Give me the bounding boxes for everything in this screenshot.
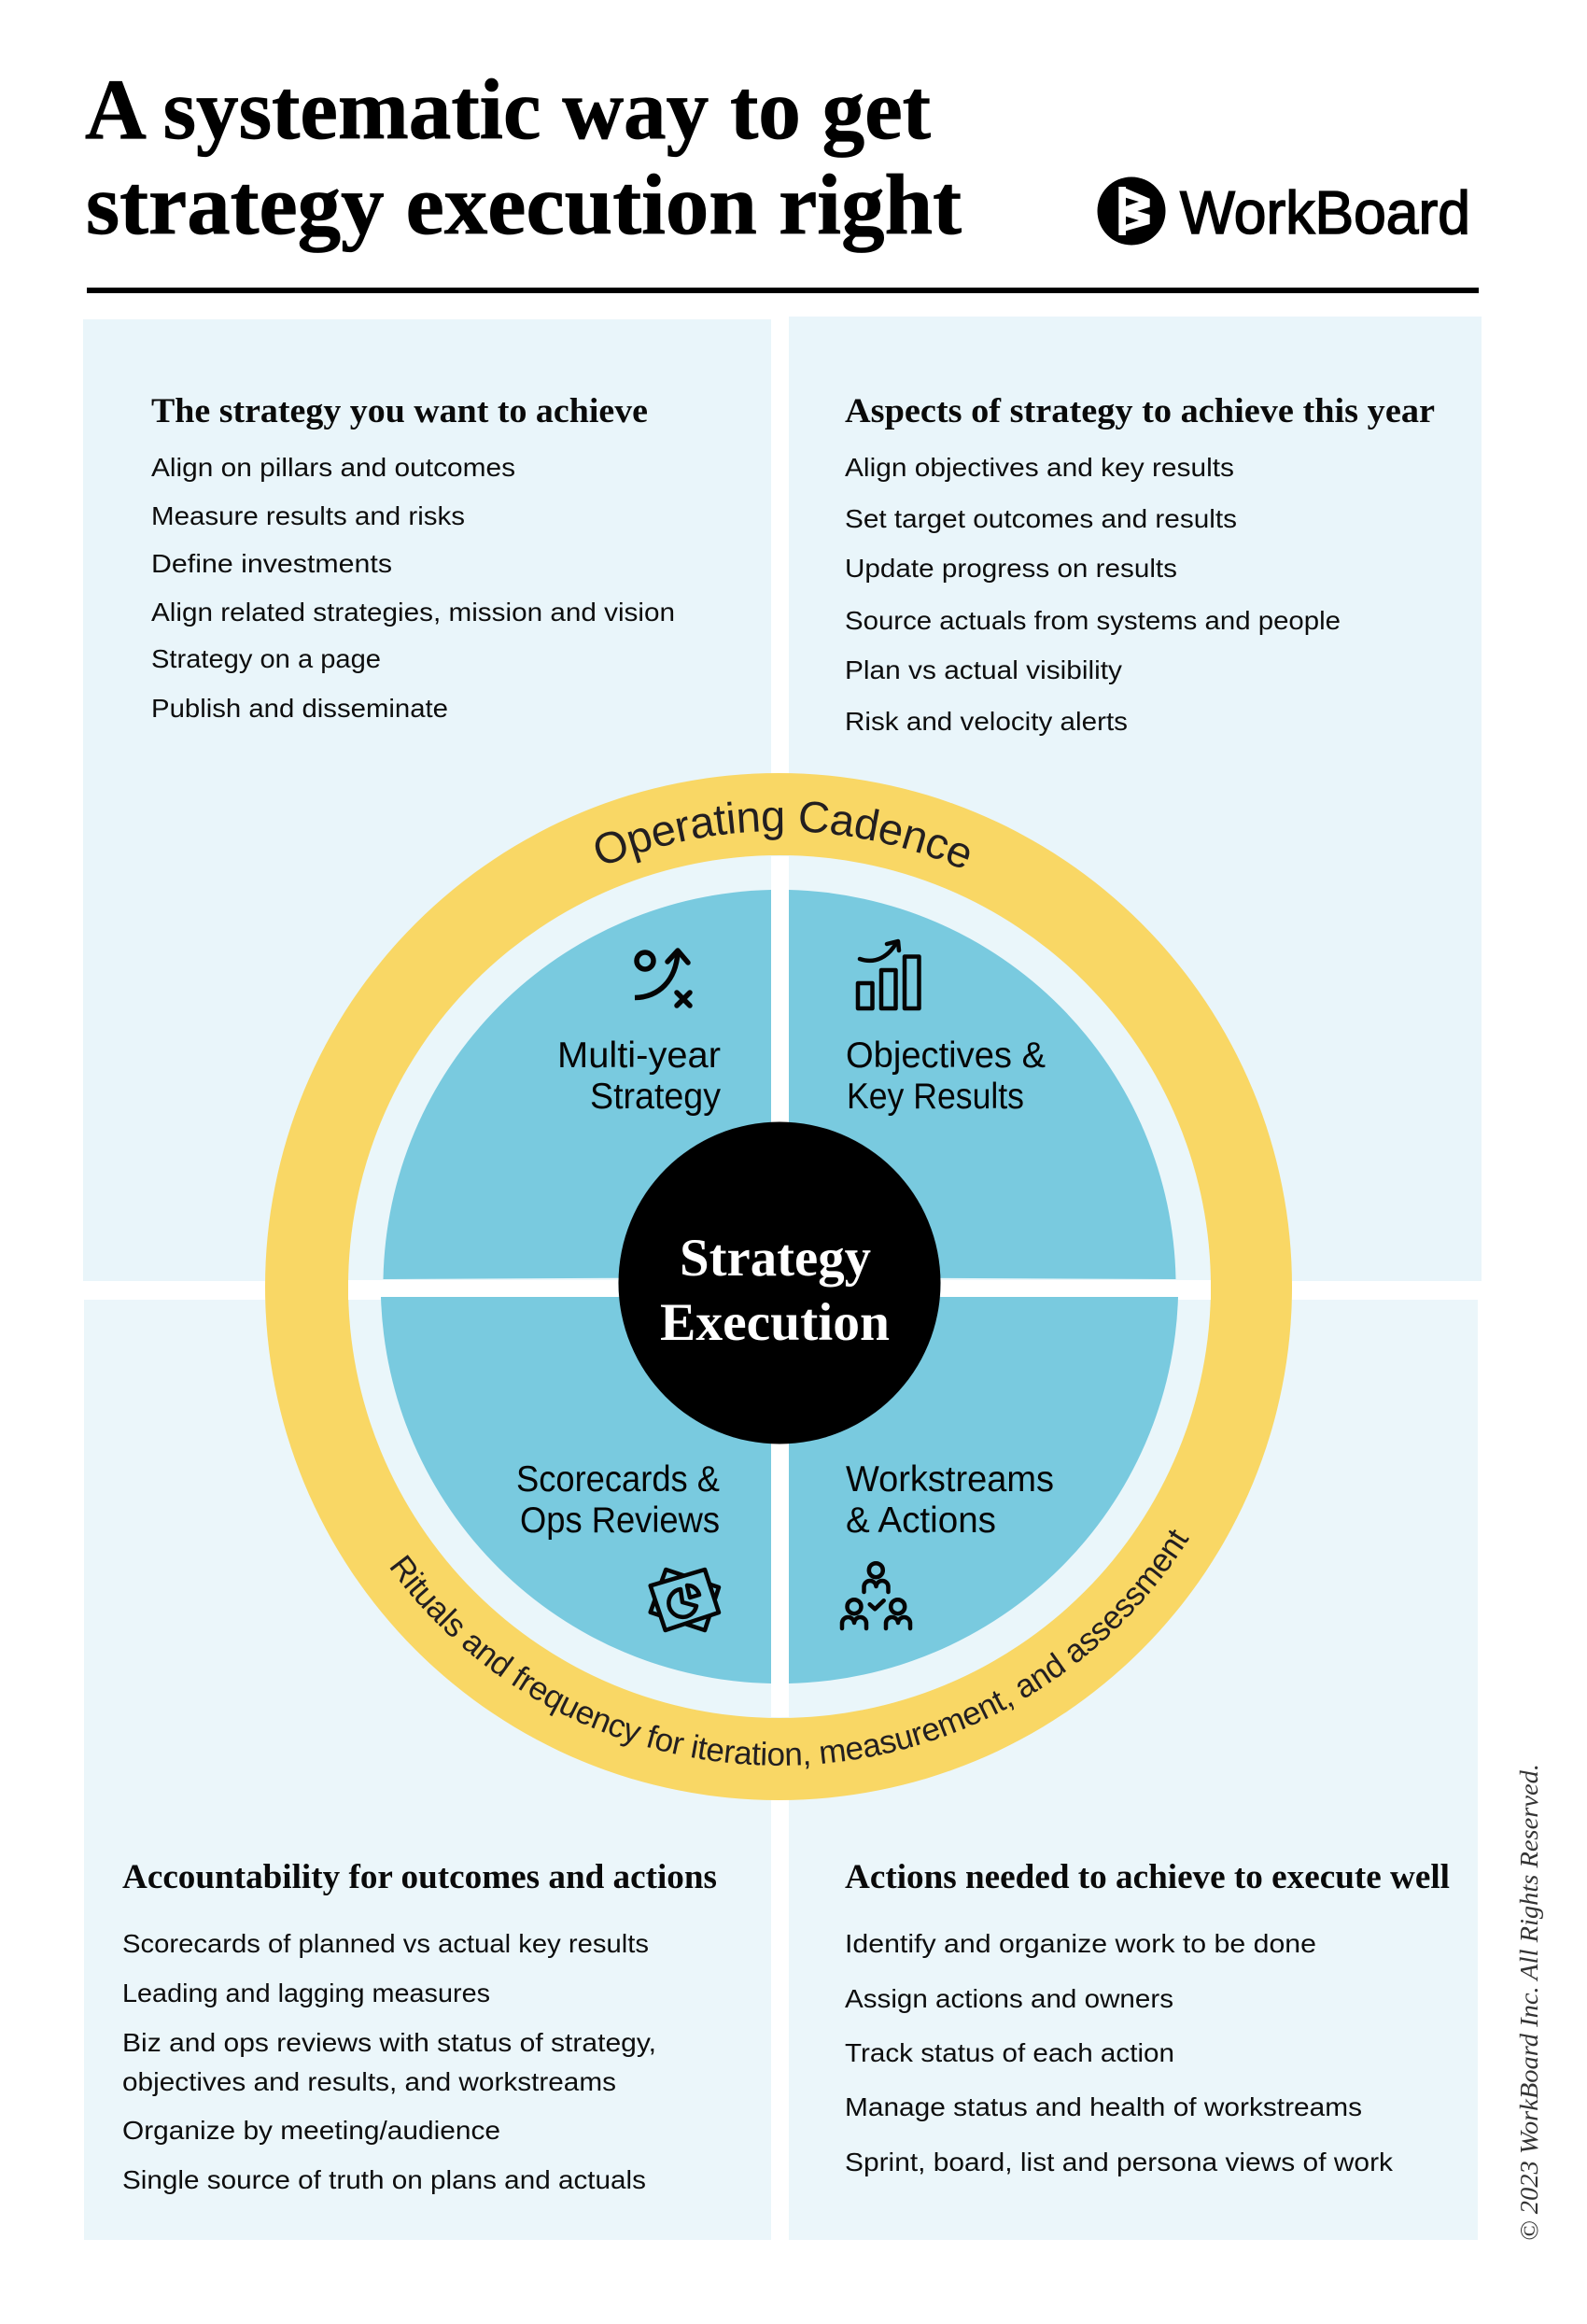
copyright note: © 2023 WorkBoard Inc. All Rights Reserved. — [1515, 1764, 1543, 2241]
text block: actions needed to achieve to execute well: Identify and organize work to be done — [845, 1929, 1316, 1958]
title: A systematic way to get — [85, 62, 931, 157]
text block: aspects of strategy to achieve this year: Set target outcomes and results — [845, 504, 1237, 533]
text block: accountability for outcomes and actions: objectives and results, and workstreams — [122, 2067, 616, 2096]
curved label: rituals and frequency: Rituals and frequency for iteration, measurement, and assessment — [390, 1529, 1189, 1768]
text block: actions needed to achieve to execute well: Track status of each action — [845, 2038, 1174, 2067]
text block: the strategy you want to achieve: Align on pillars and outcomes — [151, 453, 515, 482]
title: strategy execution right — [86, 157, 962, 252]
text block: accountability for outcomes and actions: Organize by meeting/audience — [122, 2116, 500, 2145]
label: objectives and key results — [846, 1035, 1046, 1117]
label: objectives and key results: Key Results — [847, 1077, 1024, 1117]
text block: actions needed to achieve to execute well: Actions needed to achieve to execute well — [845, 1858, 1450, 1896]
icon: team with check — [842, 1563, 910, 1628]
label: scorecards and ops reviews: Scorecards & — [516, 1459, 720, 1500]
panel: accountability — [84, 1300, 771, 2240]
label: workstreams and actions: Workstreams — [846, 1459, 1054, 1500]
text block: actions needed to achieve to execute well: Manage status and health of workstreams — [845, 2092, 1362, 2121]
text block: aspects of strategy to achieve this year: Plan vs actual visibility — [845, 655, 1122, 684]
text block: the strategy you want to achieve: The strategy you want to achieve — [151, 392, 648, 430]
WorkBoard logo: WorkBoard — [1180, 178, 1470, 246]
label: scorecards and ops reviews — [516, 1459, 720, 1541]
quadrant: workstreams and actions — [789, 1297, 1178, 1683]
icon: slides with pie chart — [651, 1570, 719, 1630]
text block: actions needed to achieve to execute well: Sprint, board, list and persona views of work — [845, 2148, 1394, 2176]
label: workstreams and actions — [846, 1459, 1054, 1541]
text block: the strategy you want to achieve: Define investments — [151, 549, 392, 578]
label: multi-year strategy — [557, 1035, 721, 1117]
text block: the strategy you want to achieve: Align related strategies, mission and vision — [151, 598, 675, 627]
curved label: operating cadence: Operating Cadence — [596, 801, 969, 867]
light inner ring — [348, 855, 1211, 1718]
label: multi-year strategy: Strategy — [590, 1077, 721, 1117]
center circle: strategy execution — [618, 1122, 941, 1444]
text block: the strategy you want to achieve — [151, 392, 675, 723]
panel: actions needed — [789, 1300, 1478, 2240]
header rule — [87, 288, 1479, 293]
text block: aspects of strategy to achieve this year: Source actuals from systems and people — [845, 606, 1341, 635]
text block: accountability for outcomes and actions: Accountability for outcomes and actions — [122, 1858, 717, 1896]
text block: aspects of strategy to achieve this year: Risk and velocity alerts — [845, 707, 1128, 736]
label: scorecards and ops reviews: Ops Reviews — [520, 1500, 720, 1541]
text block: aspects of strategy to achieve this year: Update progress on results — [845, 554, 1177, 583]
text block: aspects of strategy to achieve this year: Aspects of strategy to achieve this year — [845, 392, 1435, 430]
quadrant: objectives and key results — [789, 890, 1176, 1279]
text block: accountability for outcomes and actions — [122, 1858, 717, 2194]
text block: the strategy you want to achieve: Publish and disseminate — [151, 694, 448, 723]
quadrant: multi-year strategy — [383, 890, 771, 1279]
center circle: strategy execution: Execution — [660, 1293, 890, 1352]
label: objectives and key results: Objectives & — [846, 1035, 1046, 1076]
text block: accountability for outcomes and actions: Biz and ops reviews with status of strategy, — [122, 2028, 656, 2057]
icon: strategy play — [635, 951, 690, 1006]
center circle: strategy execution: Strategy — [680, 1229, 871, 1288]
title — [85, 62, 962, 252]
diagram: operating cadence wheel — [265, 773, 1292, 1800]
text block: accountability for outcomes and actions: Single source of truth on plans and actuals — [122, 2165, 646, 2194]
text block: actions needed to achieve to execute well — [845, 1858, 1450, 2176]
text block: actions needed to achieve to execute well: Assign actions and owners — [845, 1984, 1173, 2013]
text block: aspects of strategy to achieve this year — [845, 392, 1435, 736]
text block: the strategy you want to achieve: Strategy on a page — [151, 644, 381, 673]
yellow operating cadence ring — [265, 773, 1292, 1800]
icon: rising bar chart — [858, 941, 919, 1008]
text block: aspects of strategy to achieve this year: Align objectives and key results — [845, 453, 1234, 482]
text block: accountability for outcomes and actions: Leading and lagging measures — [122, 1979, 490, 2007]
label: workstreams and actions: & Actions — [846, 1500, 996, 1541]
panel: aspects of strategy this year — [789, 317, 1482, 1281]
label: multi-year strategy: Multi-year — [557, 1035, 721, 1076]
text block: the strategy you want to achieve: Measure results and risks — [151, 501, 465, 530]
text block: accountability for outcomes and actions: Scorecards of planned vs actual key results — [122, 1929, 649, 1958]
quadrant: scorecards and ops reviews — [381, 1297, 771, 1683]
panel: strategy you want to achieve — [83, 319, 771, 1281]
